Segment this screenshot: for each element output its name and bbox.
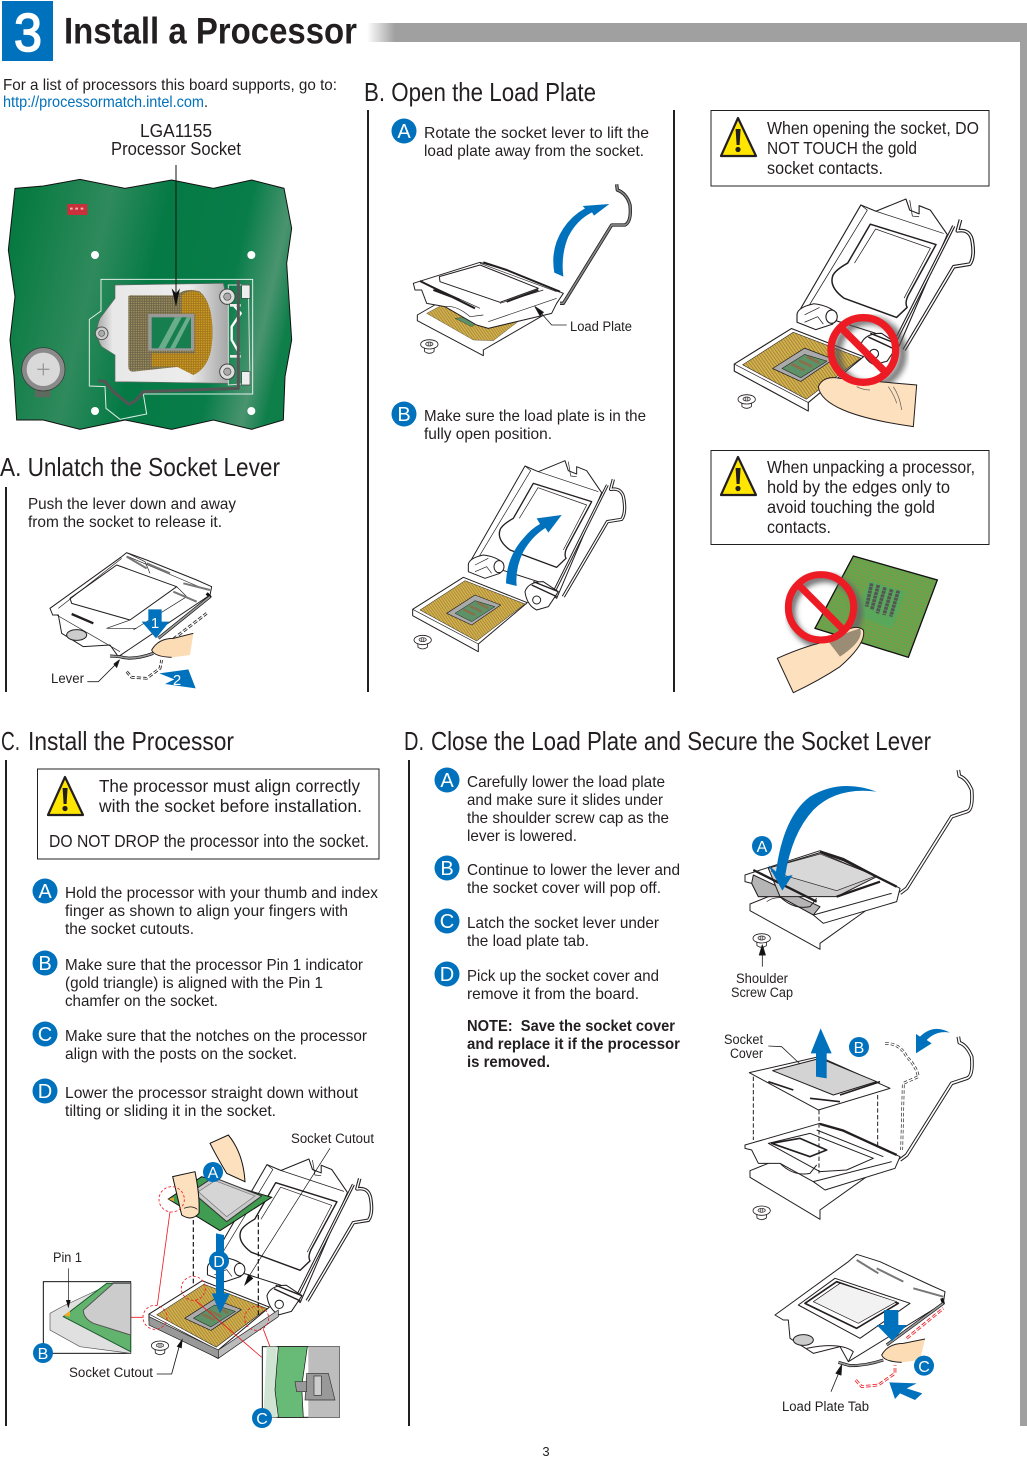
warning box C (38, 769, 379, 859)
step D-B: B (440, 858, 454, 880)
label: socket cover (724, 1032, 763, 1061)
label: socket cutout top: Socket Cutout (291, 1131, 374, 1146)
heading: section D: Close the Load Plate and Secure the Socket Lever (431, 726, 931, 756)
illustration: do not touch socket (734, 199, 973, 427)
step D-D: remove it from the board. (467, 986, 639, 1003)
step C-C: C (38, 1024, 52, 1046)
heading: section C: C. (1, 726, 20, 756)
intro text (3, 77, 337, 111)
step D-C: Latch the socket lever under (467, 915, 660, 932)
callout letters: C (256, 1411, 268, 1428)
title: Install a Processor (64, 10, 357, 52)
label: socket cover: Cover (730, 1046, 763, 1061)
warning box 2: hold by the edges only to (767, 477, 950, 497)
callout letters: D (213, 1254, 225, 1271)
warning box 1: NOT TOUCH the gold (767, 138, 917, 158)
heading: section C: Install the Processor (28, 726, 234, 756)
step D-A: lever is lowered. (467, 828, 577, 845)
text: section A: Push the lever down and away (28, 496, 236, 513)
header number badge: 3 (14, 3, 42, 63)
text: section A (28, 496, 236, 531)
step C-A (32, 878, 378, 938)
step C-B (32, 950, 364, 1010)
socket label (111, 121, 241, 159)
header bar and page border (367, 23, 1027, 1426)
heading: section A: A. Unlatch the Socket Lever (0, 452, 280, 482)
step C-B: Make sure that the processor Pin 1 indicator (65, 957, 364, 974)
socket label: Processor Socket (111, 139, 241, 159)
heading: section B: B. Open the Load Plate (364, 77, 596, 107)
step C-C: Make sure that the notches on the processor (65, 1028, 368, 1045)
warning box C: The processor must align correctly (99, 776, 360, 796)
intro text: http://processormatch.intel.com. (3, 94, 208, 111)
note: and replace it if the processor (467, 1036, 680, 1053)
step D-C: the load plate tab. (467, 933, 589, 950)
step B-B text: Make sure the load plate is in the (424, 408, 646, 425)
numbers on unlatch arrows: 2 (173, 672, 181, 689)
badge A (392, 118, 416, 144)
step B-A text: load plate away from the socket. (424, 143, 644, 160)
warning box 1 (711, 110, 989, 186)
step D-B: the socket cover will pop off. (467, 880, 661, 897)
numbers on unlatch arrows (151, 615, 181, 689)
label: shoulder screw cap: Screw Cap (731, 985, 793, 1000)
step D-C (434, 908, 660, 950)
text: section A: from the socket to release it. (28, 514, 222, 531)
badge B illustration: B (854, 1040, 864, 1057)
note: is removed. (467, 1054, 550, 1071)
numbers on unlatch arrows: 1 (151, 615, 159, 632)
step D-B: Continue to lower the lever and (467, 862, 680, 879)
illustration: install processor (43, 1135, 372, 1417)
warning box C: DO NOT DROP the processor into the socket. (49, 831, 369, 851)
illustration: latch lever (775, 1254, 945, 1400)
warning box 2: avoid touching the gold (767, 497, 935, 517)
warning box C: with the socket before installation. (98, 796, 362, 816)
step C-A: finger as shown to align your fingers with (65, 903, 348, 920)
label: shoulder screw cap: Shoulder (736, 971, 788, 986)
warning box 1: When opening the socket, DO (767, 118, 979, 138)
illustration: lift lever (413, 184, 630, 356)
label: pin 1: Pin 1 (53, 1250, 82, 1265)
badge C illustration: C (918, 1359, 930, 1376)
callout letters (33, 1162, 272, 1428)
badge B (392, 402, 416, 426)
warning box 2 (711, 450, 989, 544)
badge B illustration (849, 1037, 869, 1057)
step C-B: chamfer on the socket. (65, 993, 218, 1010)
divider lines B (367, 110, 675, 692)
label: socket cover: Socket (724, 1032, 763, 1047)
step C-C: align with the posts on the socket. (65, 1046, 297, 1063)
label: shoulder screw cap (731, 971, 793, 1000)
step C-D (32, 1078, 359, 1120)
divider line D (408, 760, 410, 1426)
step C-A: the socket cutouts. (65, 921, 194, 938)
step D-C: C (440, 911, 454, 933)
label: lever: Lever (51, 671, 84, 686)
divider line A (5, 487, 7, 692)
step C-C (32, 1022, 368, 1063)
callout letters: A (208, 1165, 219, 1182)
step C-D: D (38, 1081, 52, 1103)
warning box 2: contacts. (767, 517, 831, 537)
step B-A text: Rotate the socket lever to lift the (424, 125, 649, 142)
warning box 2: When unpacking a processor, (767, 457, 975, 477)
step B-B text (424, 408, 646, 443)
step C-B: B (38, 953, 52, 975)
step C-A: Hold the processor with your thumb and index (65, 885, 378, 902)
intro text: For a list of processors this board supports, go to: (3, 77, 337, 94)
step C-B: (gold triangle) is aligned with the Pin 1 (65, 975, 323, 992)
label: load plate: Load Plate (570, 319, 632, 334)
step C-D: tilting or sliding it in the socket. (65, 1103, 276, 1120)
illustration: do not touch contacts (777, 556, 937, 693)
step D-A: A (440, 770, 454, 792)
illustration: unlatch lever (50, 553, 212, 688)
step C-D: Lower the processor straight down without (65, 1085, 359, 1102)
step D-A: Carefully lower the load plate (467, 774, 665, 791)
badge B: B (397, 404, 411, 426)
illustration: lower load plate (745, 770, 972, 967)
note: NOTE: Save the socket cover (467, 1018, 675, 1035)
step C-A: A (38, 881, 52, 903)
illustration: open load plate (413, 461, 625, 652)
callout letters: B (38, 1346, 48, 1363)
label: load plate tab: Load Plate Tab (782, 1399, 869, 1414)
step D-D: Pick up the socket cover and (467, 968, 659, 985)
step D-D: D (440, 964, 454, 986)
step D-B (434, 856, 680, 897)
badge D illustration A: A (757, 839, 768, 856)
step D-A (434, 768, 669, 845)
step D-A: and make sure it slides under (467, 792, 664, 809)
illustration: socket cover removal (745, 1028, 972, 1220)
step B-A text (424, 125, 649, 160)
note (467, 1018, 680, 1071)
motherboard illustration (8, 165, 292, 429)
step D-A: the shoulder screw cap as the (467, 810, 669, 827)
badge D illustration A (752, 836, 772, 856)
badge A: A (397, 121, 411, 143)
divider line C (5, 760, 7, 1426)
socket label: LGA1155 (140, 121, 212, 141)
label: socket cutout bottom: Socket Cutout (69, 1365, 153, 1380)
warning box 1: socket contacts. (767, 158, 883, 178)
step B-B text: fully open position. (424, 426, 552, 443)
step D-D (434, 962, 659, 1003)
header number badge (2, 1, 53, 63)
heading: section D: D. (404, 726, 424, 756)
